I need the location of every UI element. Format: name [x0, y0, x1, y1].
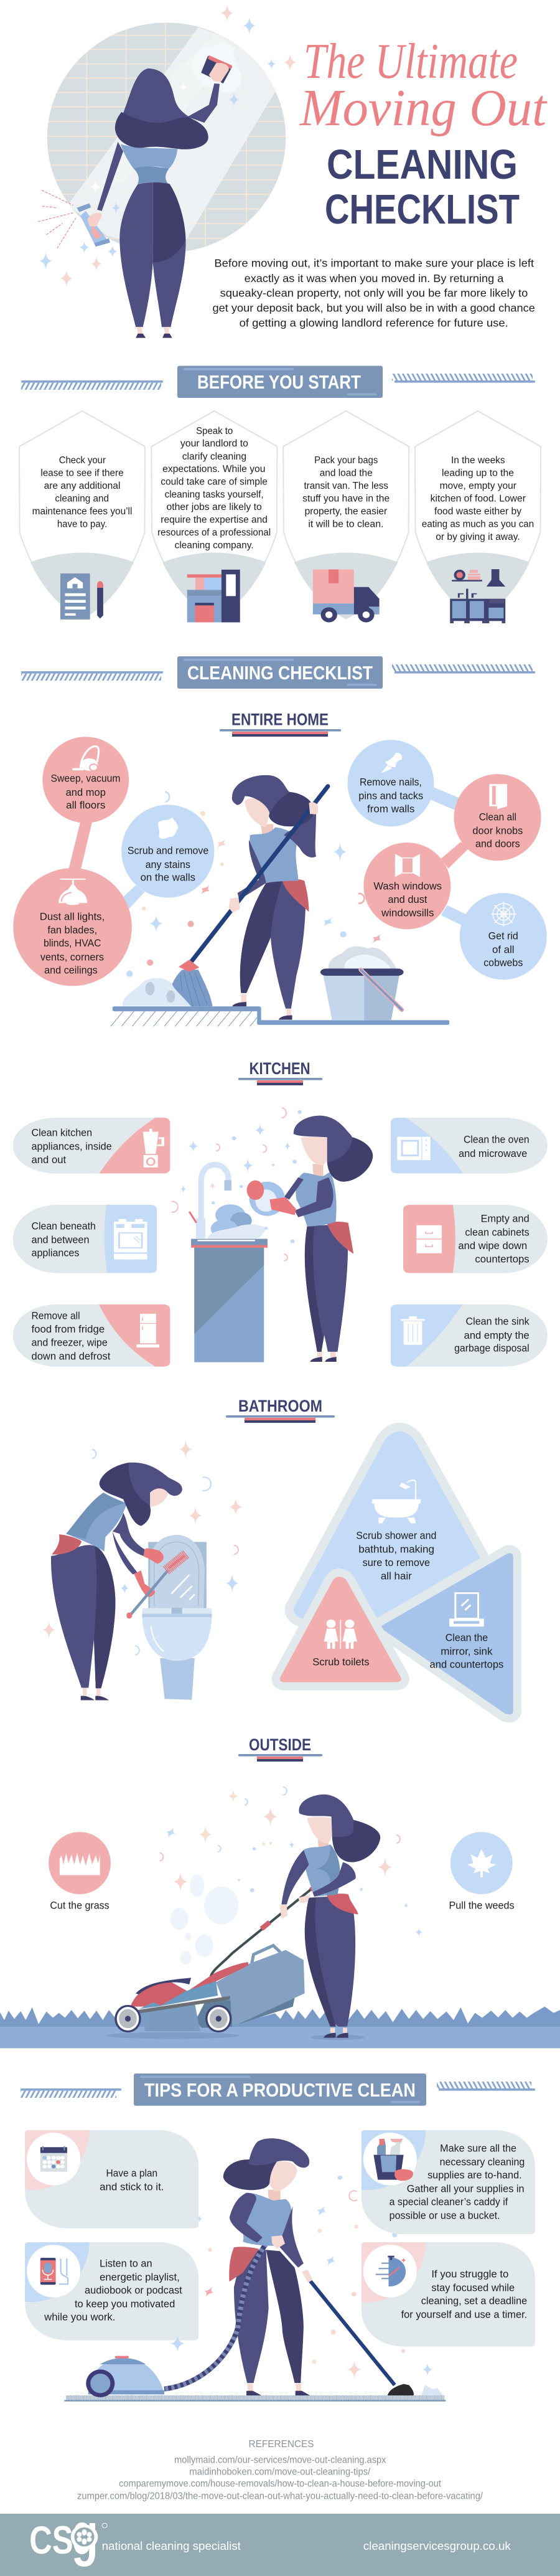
tiled circle backdrop — [43, 19, 293, 257]
icon: trash can — [401, 1316, 425, 1345]
bubble: get rid of cobwebs — [460, 893, 547, 979]
bubble: remove nails — [348, 740, 434, 826]
long hair — [115, 68, 208, 149]
bin bag — [388, 2384, 414, 2395]
card: have a plan: and stick to it. — [100, 2181, 164, 2192]
floor with hatch — [111, 1006, 449, 1026]
card: remove food from fridge: food from fridge — [32, 1323, 105, 1335]
banner: tips for a productive clean: TIPS FOR A PRODUCTIVE CLEAN — [144, 2080, 416, 2101]
triangle panel: scrub toilets: Scrub toilets — [312, 1656, 370, 1668]
bubble: clean door knobs: and doors — [475, 838, 520, 849]
bubble: clean door knobs — [454, 774, 541, 861]
sparkles and dots — [126, 792, 385, 977]
icon: ceiling lamp — [58, 879, 87, 905]
bubble: dust lights: vents, corners — [40, 951, 104, 963]
sparkles — [42, 1441, 242, 1655]
bubble: scrub stains: Scrub and remove — [128, 845, 208, 856]
icon: door — [489, 784, 507, 809]
bathroom section — [42, 1432, 513, 1714]
card: stay focused with a timer — [362, 2242, 535, 2347]
card: speak to your landlord: cleaning tasks yourself, — [165, 489, 264, 500]
icon: calendar — [40, 2146, 67, 2172]
card: clean kitchen appliances: and out — [32, 1154, 66, 1166]
triangle panel: scrub shower: Scrub shower and — [356, 1530, 436, 1541]
foam on the wall — [192, 43, 241, 93]
icon: lease document and pen — [60, 573, 103, 620]
bubble: pull the weeds — [449, 1832, 515, 1911]
bubble: dust lights: and ceilings — [44, 964, 98, 976]
card: have a plan: Have a plan — [106, 2168, 157, 2179]
card: clean beneath appliances: and between — [32, 1234, 89, 1245]
card: speak to your landlord: Speak to — [196, 426, 233, 436]
banner: cleaning checklist — [21, 656, 535, 689]
card: speak to your landlord: clarify cleaning — [182, 451, 246, 462]
logo: CSG — [29, 2501, 107, 2567]
sparkles on figure — [90, 82, 240, 214]
card: check your lease: maintenance fees you’ll — [32, 506, 132, 517]
bubble: pull the weeds: Pull the weeds — [449, 1900, 515, 1911]
card: pack your bags: it will be to clean. — [308, 519, 383, 529]
card: empty cabinets — [403, 1205, 548, 1273]
card: check your lease: Check your — [59, 455, 106, 466]
bubble: get rid of cobwebs: Get rid — [488, 930, 518, 941]
bubble: dust lights: blinds, HVAC — [44, 937, 101, 949]
outside section — [0, 1787, 560, 2048]
sink unit — [191, 1239, 268, 1362]
card: empty your kitchen — [415, 411, 541, 623]
bucket with foam — [320, 946, 404, 1021]
triangle panel: scrub shower — [294, 1432, 480, 1620]
woman scrubbing toilet — [51, 1463, 187, 1701]
logo: CSG: CS — [29, 2517, 73, 2562]
icon: timer — [376, 2256, 406, 2286]
icon: grass — [60, 1853, 100, 1875]
triangle panel: scrub shower: all hair — [381, 1570, 412, 1582]
card: check your lease: have to pay. — [57, 519, 107, 529]
torso — [121, 144, 177, 184]
card: speak to your landlord — [151, 411, 277, 622]
card: empty your kitchen: In the weeks — [451, 455, 505, 466]
card: pack your bags: and load the — [320, 468, 373, 478]
bubble: sweep vacuum mop: all floors — [66, 800, 105, 811]
banner: before you start: BEFORE YOU START — [197, 372, 361, 393]
bubble: get rid of cobwebs: cobwebs — [483, 957, 523, 968]
title: The Ultimate Moving Out — [299, 34, 548, 137]
bubble: wash windows: Wash windows — [373, 880, 442, 892]
heading: entire home — [220, 710, 341, 737]
icon: window — [395, 854, 420, 877]
icon: cobweb — [491, 902, 516, 927]
bubble: get rid of cobwebs: of all — [492, 944, 515, 955]
footer bar — [0, 2501, 560, 2576]
banner: tips for a productive clean — [21, 2074, 535, 2106]
lawn mower — [114, 1885, 317, 2032]
icon: bathtub and shower — [372, 1480, 421, 1523]
bubble: cut the grass — [49, 1832, 111, 1911]
heading: outside — [238, 1735, 322, 1762]
dishes in sink with foam — [207, 1204, 266, 1238]
card: listen to a playlist: to keep you motivated — [75, 2298, 175, 2309]
card: empty your kitchen: leading up to the — [442, 468, 514, 478]
woman vacuuming — [164, 2138, 394, 2389]
icon: push pin — [381, 753, 402, 773]
faucet — [189, 1165, 231, 1238]
foam pile — [123, 978, 195, 1006]
bubble: dust lights: fan blades, — [47, 924, 97, 936]
entire home section — [13, 737, 547, 1026]
card: check your lease: lease to see if there — [40, 468, 124, 478]
card: speak to your landlord: cleaning company. — [175, 540, 254, 550]
tips section — [25, 2130, 535, 2389]
card: listen to a playlist: audiobook or podcast — [85, 2285, 182, 2296]
card: clean the sink — [391, 1305, 548, 1367]
card: necessary supplies — [362, 2130, 535, 2234]
bubble: scrub stains: any stains — [146, 859, 190, 870]
triangle panel: clean the mirror: Clean the — [446, 1632, 488, 1643]
card: listen to a playlist: Listen to an — [100, 2258, 152, 2269]
card: pack your bags: Pack your bags — [314, 455, 378, 466]
icon: cleaning caddy — [373, 2139, 413, 2181]
sparkles — [170, 2329, 432, 2378]
vacuum cleaner — [86, 2356, 164, 2397]
bubble: remove nails: pins and tacks — [358, 790, 423, 801]
tagline: national cleaning specialist — [102, 2539, 241, 2552]
sparkles — [196, 2176, 397, 2298]
bubble: sweep vacuum mop: Sweep, vacuum — [51, 773, 120, 784]
icon: microwave — [397, 1137, 431, 1160]
bubble: wash windows: and dust — [388, 894, 427, 905]
sparkles and grass clippings — [160, 1787, 422, 1965]
triangle panel: scrub toilets — [280, 1577, 401, 1682]
card: speak to your landlord: resources of a professional — [157, 527, 271, 538]
bubble: dust lights — [13, 868, 132, 986]
card: speak to your landlord: could take care of simple — [161, 476, 268, 487]
title: Cleaning Checklist — [325, 141, 520, 233]
bubble: sweep vacuum mop — [42, 737, 129, 823]
sparkles — [39, 5, 296, 286]
card: check your lease: cleaning and — [55, 493, 109, 504]
icon: phone and earphones — [40, 2258, 68, 2285]
banner: before you start — [21, 366, 535, 398]
feet — [246, 2384, 310, 2395]
card: listen to a playlist — [25, 2242, 198, 2341]
banner: cleaning checklist: CLEANING CHECKLIST — [187, 663, 373, 684]
spray mist lines — [38, 190, 76, 248]
heading: outside: OUTSIDE — [249, 1735, 311, 1754]
icon: vacuum — [73, 747, 99, 771]
heading: kitchen — [238, 1059, 322, 1085]
card: pack your bags: property, the easier — [305, 506, 387, 517]
card: speak to your landlord: other jobs are likely to — [166, 501, 262, 512]
bubble: clean door knobs: Clean all — [479, 811, 516, 823]
rug — [64, 2395, 446, 2402]
before-you-start cards — [19, 411, 541, 623]
card: check your lease — [19, 411, 145, 620]
references: REFERENCES — [249, 2438, 314, 2450]
bubble: wash windows: windowsills — [381, 907, 434, 918]
title: The Ultimate Moving Out: Moving Out — [299, 79, 548, 137]
mop — [172, 970, 213, 1006]
card: remove food from fridge — [13, 1305, 170, 1367]
card: listen to a playlist: while you work. — [44, 2311, 115, 2323]
bubble: scrub stains — [121, 804, 214, 898]
card: pack your bags: transit van. The less — [304, 480, 388, 491]
title: Cleaning Checklist: CLEANING — [327, 141, 518, 188]
heading: bathroom — [226, 1397, 335, 1423]
icon: weed leaf — [467, 1849, 497, 1877]
icon: mirror — [449, 1593, 484, 1626]
squeegee and hand — [201, 55, 232, 83]
sparkles and soap bubbles — [172, 1108, 302, 1261]
spray bottle — [77, 203, 110, 247]
card: clean kitchen appliances: Clean kitchen — [32, 1127, 92, 1138]
intro paragraph — [213, 257, 535, 329]
card: clean beneath appliances — [13, 1205, 157, 1273]
icon: transit van with box — [313, 570, 380, 622]
icon: restroom figures — [324, 1620, 357, 1649]
hero illustration: woman cleaning tiled wall — [38, 5, 296, 338]
card: empty cabinets: Empty and — [481, 1213, 530, 1224]
card: have a plan — [25, 2130, 198, 2229]
kitchen section — [13, 1108, 548, 1367]
logo: CSG: g — [72, 2501, 98, 2567]
triangle panel: clean the mirror: mirror, sink — [441, 1646, 493, 1657]
card: speak to your landlord: your landlord to — [180, 438, 248, 449]
bubble: cut the grass: Cut the grass — [50, 1900, 110, 1911]
toilet — [142, 1535, 212, 1700]
bubble: dust lights: Dust all lights, — [40, 911, 105, 922]
card: pack your bags — [283, 411, 409, 622]
triangle panel: scrub shower: sure to remove — [363, 1557, 430, 1569]
card: clean oven and microwave — [391, 1118, 548, 1174]
raised arm — [187, 83, 220, 123]
legs — [119, 182, 185, 338]
woman mopping — [179, 775, 328, 1020]
title: The Ultimate Moving Out: The Ultimate — [304, 34, 518, 89]
card: pack your bags: stuff you have in the — [302, 493, 390, 504]
card: clean kitchen appliances — [13, 1118, 170, 1174]
title: Cleaning Checklist: CHECKLIST — [325, 186, 520, 233]
card: listen to a playlist: energetic playlist, — [100, 2272, 180, 2283]
triangle panel: clean the mirror — [380, 1553, 513, 1714]
triangle panel: clean the mirror: and countertops — [430, 1659, 503, 1670]
card: empty cabinets: countertops — [475, 1253, 530, 1265]
bubble: sweep vacuum mop: and mop — [66, 786, 106, 798]
card: stay focused with a timer: If you struggle to — [431, 2268, 508, 2280]
icon: fridge — [136, 1314, 159, 1347]
grass spikes — [0, 2007, 560, 2028]
card: clean beneath appliances: Clean beneath — [32, 1220, 96, 1232]
references: maidinhoboken.com/move-out-cleaning-tips/ — [189, 2466, 371, 2477]
lowered arm — [97, 142, 123, 211]
icon: blender — [143, 1129, 164, 1168]
bubble: scrub stains: on the walls — [141, 872, 195, 883]
bubble: remove nails: Remove nails, — [360, 776, 422, 788]
icon: cleaning company shelves — [187, 570, 240, 622]
card: clean kitchen appliances: appliances, inside — [32, 1141, 112, 1152]
woman mowing — [279, 1795, 380, 2038]
triangle panel: scrub shower: bathtub, making — [358, 1544, 434, 1555]
bubble: remove nails: from walls — [367, 803, 414, 814]
heading: entire home: ENTIRE HOME — [231, 710, 329, 729]
card: remove food from fridge: Remove all — [32, 1309, 80, 1321]
ground shadows — [105, 2032, 365, 2040]
connector lines between bubbles — [68, 788, 469, 927]
card: speak to your landlord: expectations. While you — [162, 464, 265, 474]
heading: kitchen: KITCHEN — [250, 1059, 310, 1078]
icon: drawers — [416, 1225, 442, 1253]
icon: oven — [114, 1219, 147, 1260]
bubble: clean door knobs: door knobs — [472, 825, 523, 836]
icon: stain — [158, 818, 178, 839]
heading: bathroom: BATHROOM — [238, 1397, 322, 1415]
woman washing dishes — [247, 1116, 373, 1362]
references: mollymaid.com/our-services/move-out-cleaning.aspx — [174, 2454, 386, 2465]
card: remove food from fridge: down and defrost — [32, 1350, 110, 1362]
card: remove food from fridge: and freezer, wipe — [32, 1337, 108, 1348]
ground — [0, 2027, 560, 2048]
dust — [421, 2385, 443, 2395]
bubble: wash windows — [363, 842, 450, 929]
card: speak to your landlord: require the expertise and — [161, 514, 268, 525]
card: clean beneath appliances: appliances — [32, 1247, 79, 1258]
vacuum, rug and bin bag — [0, 2329, 560, 2576]
card: check your lease: are any additional — [44, 480, 120, 491]
icon: kitchen units — [450, 569, 505, 623]
references — [77, 2438, 483, 2501]
